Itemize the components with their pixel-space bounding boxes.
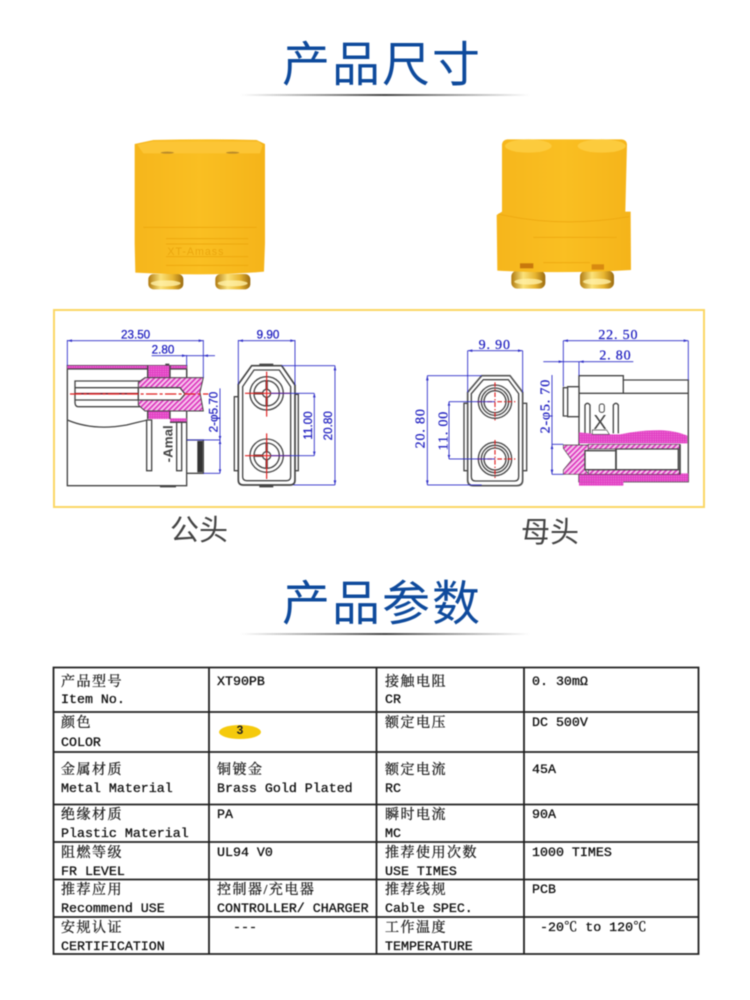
row: plastic material: 绝缘材质 <box>61 806 123 823</box>
front view: male <box>234 364 298 487</box>
housing <box>497 139 631 272</box>
row: metal material <box>61 761 556 796</box>
row: metal material: 额定电流 <box>385 761 447 778</box>
row: certification: 安规认证 <box>61 919 123 936</box>
row: metal material: RC <box>385 781 401 796</box>
row: color: 颜色 <box>61 714 92 731</box>
row: certification: TEMPERATURE <box>385 939 473 954</box>
row: flame rating: 阻燃等级 <box>61 845 123 861</box>
dimensions: front view: 9. 90 <box>479 338 511 353</box>
row: item number: 0. 30mΩ <box>532 674 588 689</box>
row: flame rating: FR LEVEL <box>61 864 125 879</box>
row: recommended use: Recommend USE <box>61 901 165 916</box>
gold contacts <box>148 274 250 289</box>
dimensions: front view: 11. 00 <box>436 411 451 450</box>
dimensions: side view: 23.50 <box>121 329 151 342</box>
row: recommended use: 控制器/充电器 <box>217 881 315 898</box>
row: recommended use: 推荐线规 <box>385 881 447 898</box>
row: flame rating: UL94 V0 <box>217 845 273 860</box>
photo: female connector <box>497 139 631 289</box>
side view: female <box>563 376 688 486</box>
row: item number <box>61 673 588 707</box>
row: plastic material <box>61 806 556 841</box>
row: color: COLOR <box>61 735 101 750</box>
row: color: 3 <box>237 723 244 737</box>
row: item number: CR <box>385 692 401 707</box>
drawing: female connector <box>414 328 688 486</box>
row: color <box>61 714 588 750</box>
dimensions: front view: 11.00 <box>302 411 315 440</box>
row: certification: --- <box>233 920 257 935</box>
row: flame rating <box>61 844 612 879</box>
mating holes <box>505 139 552 153</box>
row: item number: 产品型号 <box>61 673 123 690</box>
row: color: 额定电压 <box>385 714 447 731</box>
row: certification: CERTIFICATION <box>61 939 165 954</box>
row: item number: 接触电阻 <box>385 673 447 690</box>
dimensions: front view: 20. 80 <box>414 408 429 448</box>
label: female: 母头 <box>521 517 579 549</box>
gold contacts <box>511 271 614 289</box>
housing <box>135 139 265 274</box>
front view: female <box>464 376 527 486</box>
row: plastic material: PA <box>217 807 233 822</box>
label: male: 公头 <box>170 515 228 547</box>
row: flame rating: 1000 TIMES <box>532 845 612 860</box>
row: metal material: Brass Gold Plated <box>217 781 353 796</box>
row: plastic material: 瞬时电流 <box>385 806 447 823</box>
row: flame rating: USE TIMES <box>385 864 457 879</box>
row: item number: XT90PB <box>217 674 265 689</box>
dimensions: front view <box>238 329 336 485</box>
row: certification: -20℃ to 120℃ <box>540 920 646 935</box>
row: recommended use: CONTROLLER/ CHARGER <box>217 901 369 916</box>
row: certification: 工作温度 <box>385 919 447 936</box>
row: color: DC 500V <box>532 715 588 730</box>
row: metal material: Metal Material <box>61 781 173 796</box>
table: specifications <box>54 668 698 954</box>
title underline <box>240 94 530 96</box>
row: item number: Item No. <box>61 692 125 707</box>
dimensions: side view: 2-φ5. 70 <box>538 379 553 433</box>
dimensions: side view <box>538 328 688 474</box>
dimensions: side view <box>67 329 221 473</box>
photo: male connector: XT-Amass <box>167 246 224 258</box>
side view: male <box>67 364 208 487</box>
photo: male connector <box>135 139 265 289</box>
dimensions: side view: 22. 50 <box>598 328 638 343</box>
row: metal material: 铜镀金 <box>217 761 264 778</box>
row: metal material: 金属材质 <box>61 761 123 778</box>
dimensions: front view <box>414 338 523 485</box>
row: recommended use: 推荐应用 <box>61 881 123 898</box>
row: recommended use <box>61 881 556 916</box>
drawing: male connector <box>67 329 336 487</box>
title: product dimensions: 产品尺寸 <box>282 39 482 92</box>
dimensions: side view: 2.80 <box>152 344 175 357</box>
row: plastic material: MC <box>385 826 401 841</box>
row: recommended use: PCB <box>532 882 556 897</box>
dimensions: side view: 2. 80 <box>599 348 631 363</box>
moulded text: -Amal <box>161 425 176 462</box>
moulded text: X <box>593 412 607 434</box>
row: plastic material: 90A <box>532 807 556 822</box>
row: certification <box>61 919 646 954</box>
title underline <box>240 633 530 635</box>
row: flame rating: 推荐使用次数 <box>385 844 478 861</box>
panel: technical drawings <box>54 310 704 507</box>
table grid <box>54 668 698 954</box>
dimensions: front view: 20.80 <box>322 411 335 440</box>
row: plastic material: Plastic Material <box>61 826 189 841</box>
dimensions: front view: 9.90 <box>257 329 280 342</box>
windows <box>520 263 533 268</box>
row: recommended use: Cable SPEC. <box>385 901 473 916</box>
row: metal material: 45A <box>532 762 556 777</box>
title: product parameters: 产品参数 <box>282 578 482 631</box>
dimensions: side view: 2-φ5.70 <box>207 391 220 432</box>
